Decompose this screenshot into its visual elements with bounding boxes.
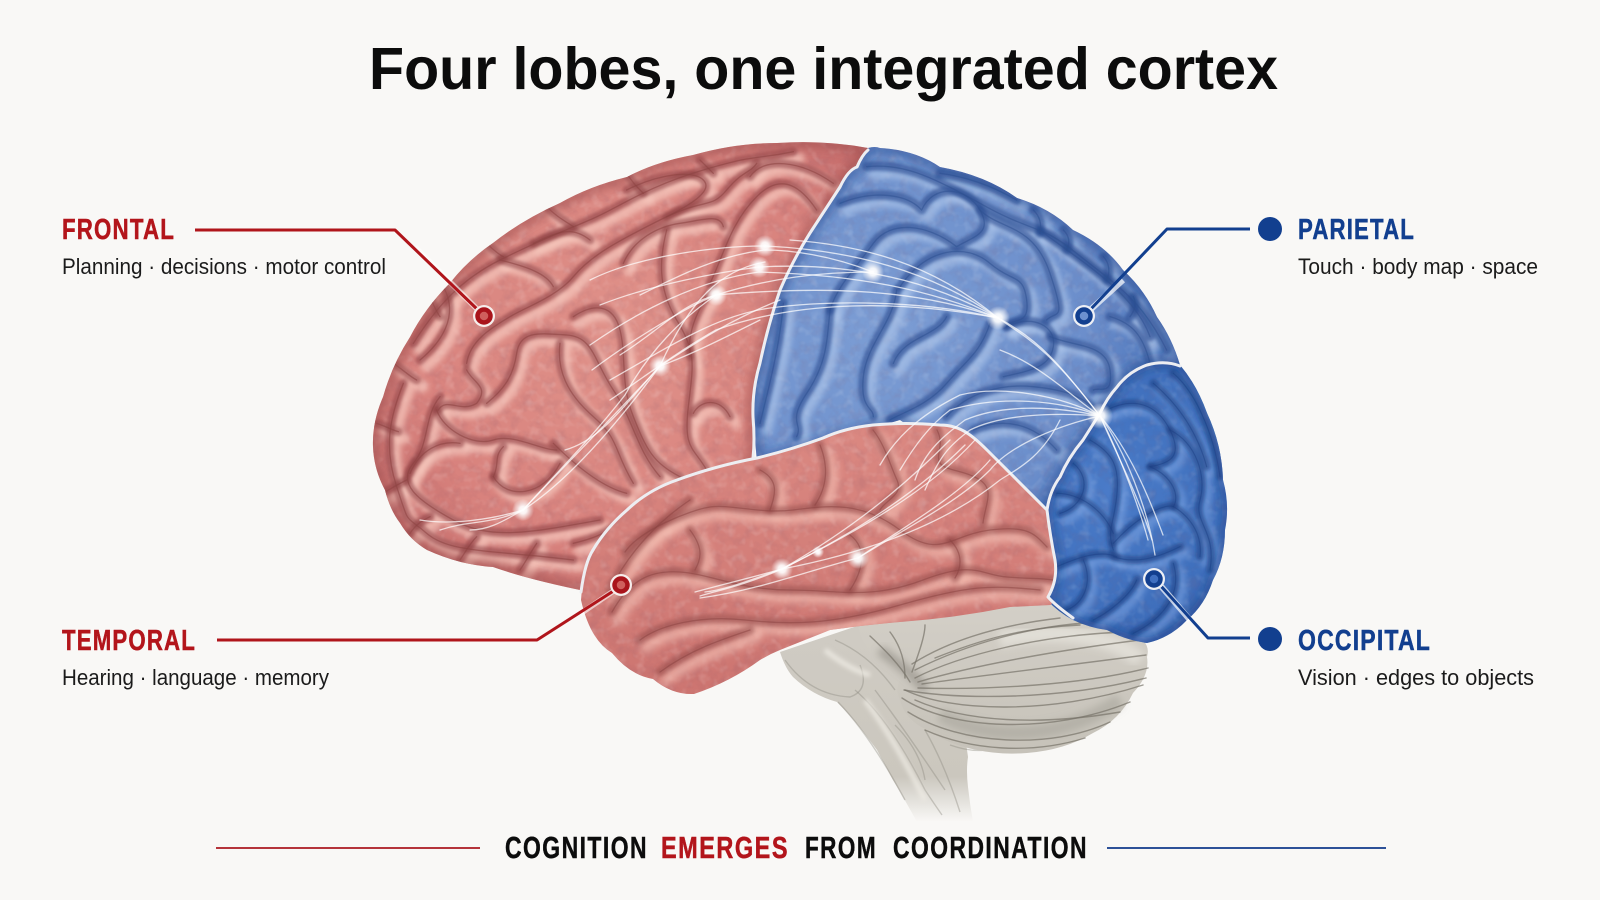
brain illustration (360, 130, 1235, 822)
callout: frontal (62, 214, 495, 327)
parietal anchor dot (1073, 305, 1095, 327)
temporal anchor dot (610, 574, 632, 596)
frontal description: Planning · decisions · motor control (62, 254, 386, 279)
connecting fibres (420, 240, 1163, 598)
frontal anchor dot (473, 305, 495, 327)
callout: occipital (1143, 568, 1534, 690)
temporal leader line (217, 590, 615, 640)
lobe boundaries (581, 150, 1180, 618)
temporal heading: TEMPORAL (62, 625, 196, 657)
occipital leader line (1160, 585, 1250, 638)
footer tagline: EMERGES (661, 830, 789, 865)
parietal leader line (1089, 229, 1250, 311)
parietal lobe (754, 147, 1180, 507)
parietal description: Touch · body map · space (1298, 254, 1538, 279)
occipital lobe (1048, 364, 1228, 643)
glowing nodes (512, 235, 1113, 580)
title: Four lobes, one integrated cortex (369, 36, 1278, 102)
parietal marker (1258, 217, 1282, 241)
brainstem (780, 625, 985, 822)
footer tagline: COGNITION (505, 830, 648, 865)
frontal lobe (372, 142, 868, 590)
occipital description: Vision · edges to objects (1298, 665, 1534, 690)
frontal heading: FRONTAL (62, 214, 175, 246)
occipital anchor dot (1143, 568, 1165, 590)
occipital marker (1258, 627, 1282, 651)
temporal description: Hearing · language · memory (62, 665, 330, 690)
footer tagline: COORDINATION (893, 830, 1088, 865)
parietal heading: PARIETAL (1298, 214, 1415, 246)
callout: temporal (62, 574, 632, 690)
occipital heading: OCCIPITAL (1298, 625, 1431, 657)
cerebellum (857, 595, 1148, 754)
callout: parietal (1073, 214, 1538, 327)
frontal leader line (195, 230, 478, 310)
footer tagline (216, 830, 1386, 865)
footer tagline: FROM (805, 830, 877, 865)
temporal lobe (575, 415, 1065, 700)
